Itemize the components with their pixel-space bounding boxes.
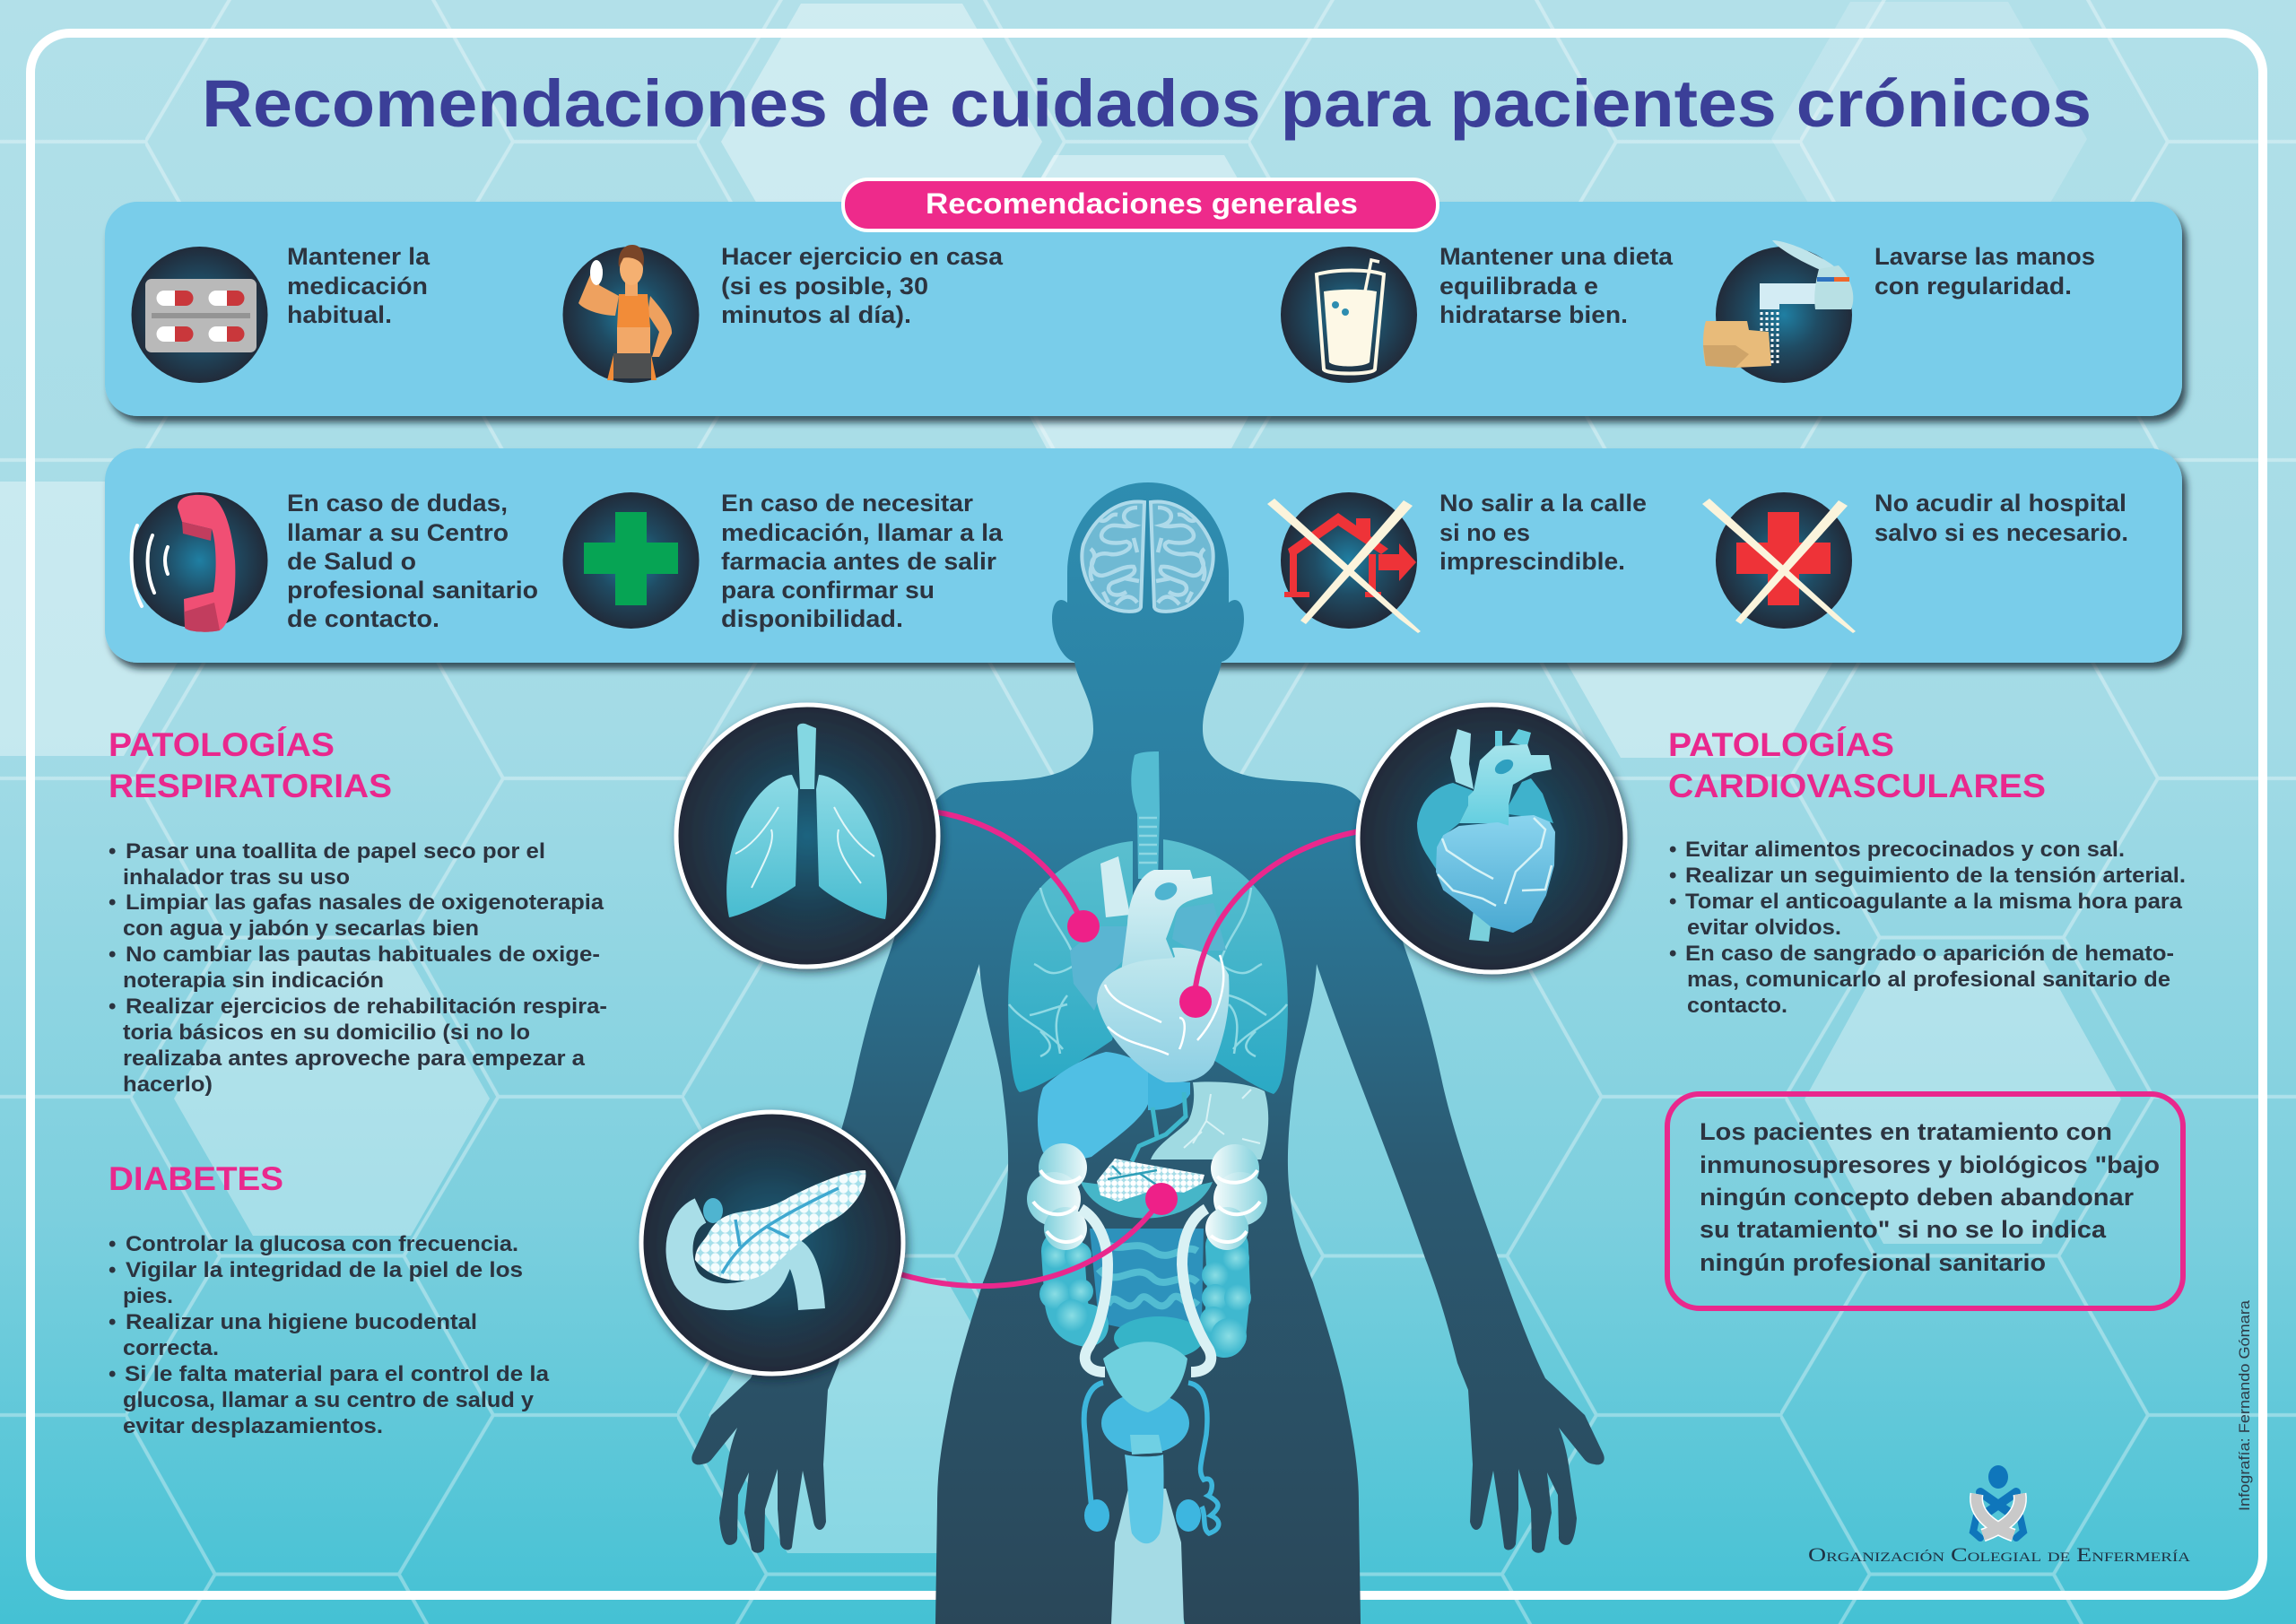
- item: call pharmacy: medicación, llamar a la: [721, 519, 1004, 546]
- body silhouette with organs: [691, 482, 1605, 1624]
- credit: Infografía: Fernando Gómara: [2236, 1299, 2253, 1511]
- section: diabetes: •: [109, 1258, 116, 1282]
- section: cardiovascular pathologies: •: [1669, 942, 1676, 966]
- section: diabetes: •: [109, 1232, 116, 1256]
- section: cardiovascular pathologies: PATOLOGÍAS: [1668, 726, 1894, 763]
- item: hand washing: Lavarse las manos: [1874, 243, 2095, 270]
- item: medication: Mantener la: [287, 243, 430, 270]
- section: diabetes: glucosa, llamar a su centro de salud y: [123, 1388, 535, 1412]
- item: call health centre: de contacto.: [287, 605, 439, 632]
- reproductive organs: [1084, 1342, 1219, 1624]
- section: diabetes: •: [109, 1362, 116, 1386]
- digestive and urinary organs: [1027, 1143, 1267, 1372]
- item: medication: medicación: [287, 273, 428, 300]
- item: do not go to hospital: No acudir al hospital: [1874, 490, 2126, 517]
- item: hand washing: [1703, 240, 2095, 383]
- section: diabetes: Controlar la glucosa con frecuencia.: [126, 1232, 518, 1256]
- item: call pharmacy: disponibilidad.: [721, 605, 903, 632]
- item: exercise: Hacer ejercicio en casa: [721, 243, 1004, 270]
- section: respiratory pathologies: •: [109, 994, 116, 1019]
- section: diabetes: [109, 1160, 550, 1438]
- section: cardiovascular pathologies: mas, comunicarlo al profesional sanitario de: [1687, 968, 2170, 992]
- callout: immunosuppressants: ningún concepto deben abandonar: [1700, 1184, 2135, 1211]
- callout: immunosuppressants: Los pacientes en tratamiento con: [1700, 1118, 2112, 1145]
- item: medication: [131, 243, 430, 383]
- section: cardiovascular pathologies: Tomar el anticoagulante a la misma hora para: [1685, 890, 2183, 914]
- item: hand washing: con regularidad.: [1874, 273, 2072, 300]
- item: call pharmacy: para confirmar su: [721, 577, 935, 604]
- title: Recomendaciones de cuidados para pacientes crónicos: [202, 66, 2092, 141]
- item: do not go to hospital: [1702, 490, 2128, 633]
- section: cardiovascular pathologies: evitar olvidos.: [1687, 916, 1841, 940]
- logo: nursing organisation: Organización Colegial de Enfermería: [1808, 1543, 2190, 1566]
- item: call health centre: En caso de dudas,: [287, 490, 508, 517]
- section: respiratory pathologies: hacerlo): [123, 1073, 213, 1097]
- item: do not go out: [1267, 490, 1647, 633]
- section: respiratory pathologies: [109, 726, 607, 1097]
- section: respiratory pathologies: No cambiar las pautas habituales de oxige-: [126, 942, 600, 967]
- item: do not go to hospital: salvo si es necesario.: [1874, 519, 2128, 546]
- section: cardiovascular pathologies: Realizar un seguimiento de la tensión arterial.: [1685, 864, 2186, 888]
- section: cardiovascular pathologies: [1668, 726, 2186, 1018]
- inset: heart: [1358, 705, 1625, 972]
- section: diabetes: pies.: [123, 1284, 173, 1308]
- logo mark: [1973, 1465, 2023, 1538]
- liver, stomach: [1038, 1052, 1268, 1161]
- item: call pharmacy: farmacia antes de salir: [721, 548, 997, 575]
- panel: general recommendations row 2: [105, 448, 2182, 663]
- lungs: [1008, 839, 1288, 1094]
- section: respiratory pathologies: realizaba antes aproveche para empezar a: [123, 1046, 586, 1071]
- section: cardiovascular pathologies: •: [1669, 864, 1676, 888]
- logo: nursing organisation: [1808, 1465, 2190, 1566]
- section: diabetes: Si le falta material para el control de la: [125, 1362, 550, 1386]
- item: do not go out: No salir a la calle: [1439, 490, 1647, 517]
- section: cardiovascular pathologies: CARDIOVASCULARES: [1668, 768, 2046, 804]
- item: exercise: (si es posible, 30: [721, 273, 928, 300]
- section: cardiovascular pathologies: En caso de sangrado o aparición de hemato-: [1685, 942, 2174, 966]
- panel: general recommendations row 1: [105, 202, 2182, 416]
- section: diabetes: evitar desplazamientos.: [123, 1414, 383, 1438]
- section: respiratory pathologies: toria básicos en su domicilio (si no lo: [123, 1020, 530, 1045]
- callout: immunosuppressants: inmunosupresores y biológicos "bajo: [1700, 1151, 2160, 1178]
- heart: [1070, 856, 1229, 1082]
- item: medication: habitual.: [287, 301, 392, 328]
- pill heading: general recommendations: Recomendaciones generales: [926, 187, 1358, 220]
- section: diabetes: •: [109, 1310, 116, 1334]
- section: respiratory pathologies: noterapia sin indicación: [123, 968, 384, 993]
- section: respiratory pathologies: Limpiar las gafas nasales de oxigenoterapia: [126, 890, 604, 915]
- connector lines and dots: [900, 812, 1360, 1286]
- section: respiratory pathologies: RESPIRATORIAS: [109, 768, 392, 804]
- pill heading: general recommendations: [843, 179, 1438, 230]
- section: respiratory pathologies: con agua y jabón y secarlas bien: [123, 916, 479, 941]
- section: diabetes: Vigilar la integridad de la piel de los: [126, 1258, 523, 1282]
- section: respiratory pathologies: PATOLOGÍAS: [109, 726, 335, 763]
- item: call pharmacy: [563, 490, 1004, 632]
- section: respiratory pathologies: Realizar ejercicios de rehabilitación respira-: [126, 994, 607, 1019]
- silhouette: [691, 482, 1605, 1624]
- trachea: [1131, 751, 1160, 879]
- section: cardiovascular pathologies: Evitar alimentos precocinados y con sal.: [1685, 838, 2125, 862]
- callout: immunosuppressants: ningún profesional sanitario: [1700, 1249, 2046, 1276]
- section: cardiovascular pathologies: •: [1669, 890, 1676, 914]
- section: respiratory pathologies: •: [109, 890, 116, 915]
- item: call pharmacy: En caso de necesitar: [721, 490, 974, 517]
- section: diabetes: Realizar una higiene bucodental: [126, 1310, 477, 1334]
- brain: [1082, 502, 1213, 612]
- item: exercise: minutos al día).: [721, 301, 911, 328]
- item: diet and hydration: Mantener una dieta: [1439, 243, 1674, 270]
- item: diet and hydration: [1281, 243, 1674, 383]
- callout: immunosuppressants: [1667, 1094, 2183, 1308]
- section: diabetes: DIABETES: [109, 1160, 283, 1197]
- callout: immunosuppressants: su tratamiento" si no se lo indica: [1700, 1216, 2107, 1243]
- item: call health centre: [131, 490, 538, 632]
- item: do not go out: si no es: [1439, 519, 1530, 546]
- section: cardiovascular pathologies: contacto.: [1687, 994, 1787, 1018]
- item: diet and hydration: equilibrada e: [1439, 273, 1598, 300]
- item: exercise: [563, 243, 1004, 383]
- item: call health centre: profesional sanitario: [287, 577, 538, 604]
- item: call health centre: llamar a su Centro: [287, 519, 509, 546]
- section: respiratory pathologies: Pasar una toallita de papel seco por el: [126, 839, 545, 864]
- item: diet and hydration: hidratarse bien.: [1439, 301, 1628, 328]
- inset: pancreas: [641, 1112, 903, 1374]
- section: cardiovascular pathologies: •: [1669, 838, 1676, 862]
- section: respiratory pathologies: •: [109, 942, 116, 967]
- section: respiratory pathologies: •: [109, 839, 116, 864]
- item: do not go out: imprescindible.: [1439, 548, 1625, 575]
- item: call health centre: de Salud o: [287, 548, 416, 575]
- inset: lungs: [676, 705, 938, 967]
- section: diabetes: correcta.: [123, 1336, 219, 1360]
- section: respiratory pathologies: inhalador tras su uso: [123, 865, 350, 890]
